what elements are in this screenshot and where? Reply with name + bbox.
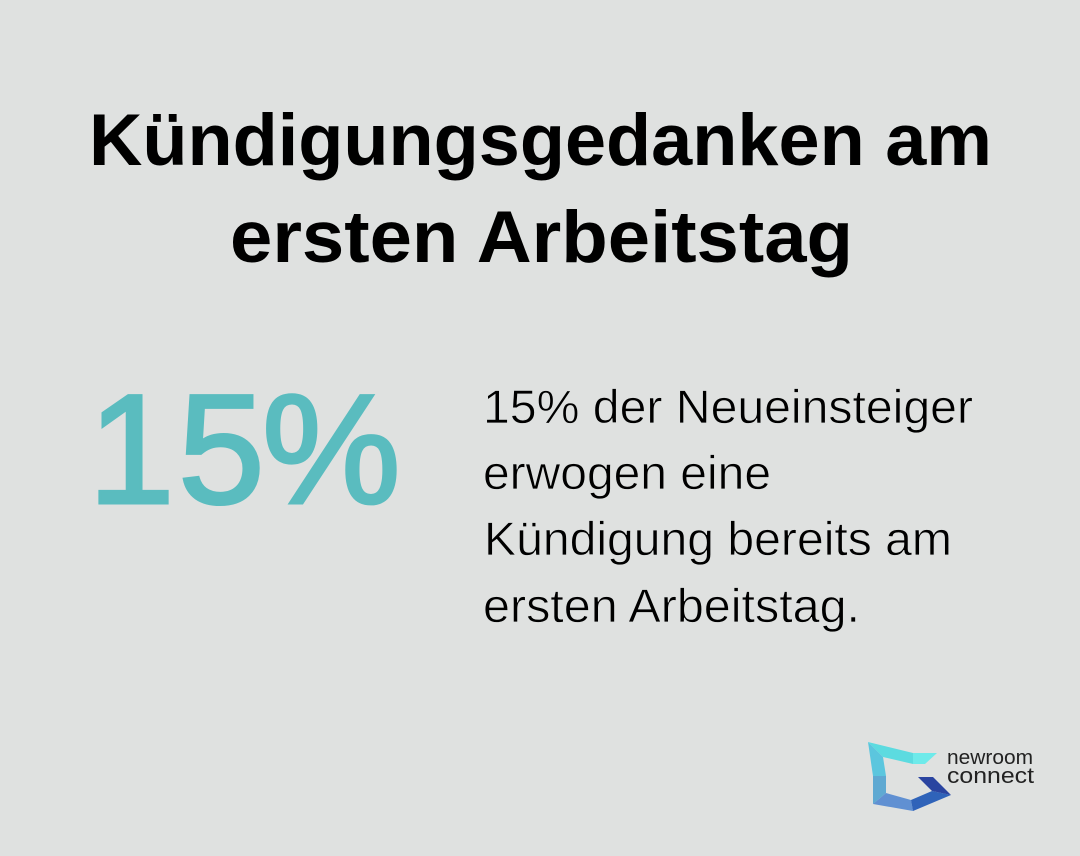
icon: logo mark [868,742,951,811]
logo: newroom connect [868,742,1034,811]
big statistic: 15%: 15% [88,363,401,537]
description text: 15% der Neueinsteiger [483,380,973,433]
logo wordmark: newroom [947,747,1033,769]
title [89,100,992,278]
logo wordmark [947,747,1034,788]
description text: Kündigung bereits am [484,512,952,565]
description text [483,380,973,632]
title: ersten Arbeitstag [230,197,853,278]
description text: ersten Arbeitstag. [483,579,860,632]
logo wordmark: connect [947,763,1034,788]
title: Kündigungsgedanken am [89,100,992,181]
description text: erwogen eine [483,446,771,499]
